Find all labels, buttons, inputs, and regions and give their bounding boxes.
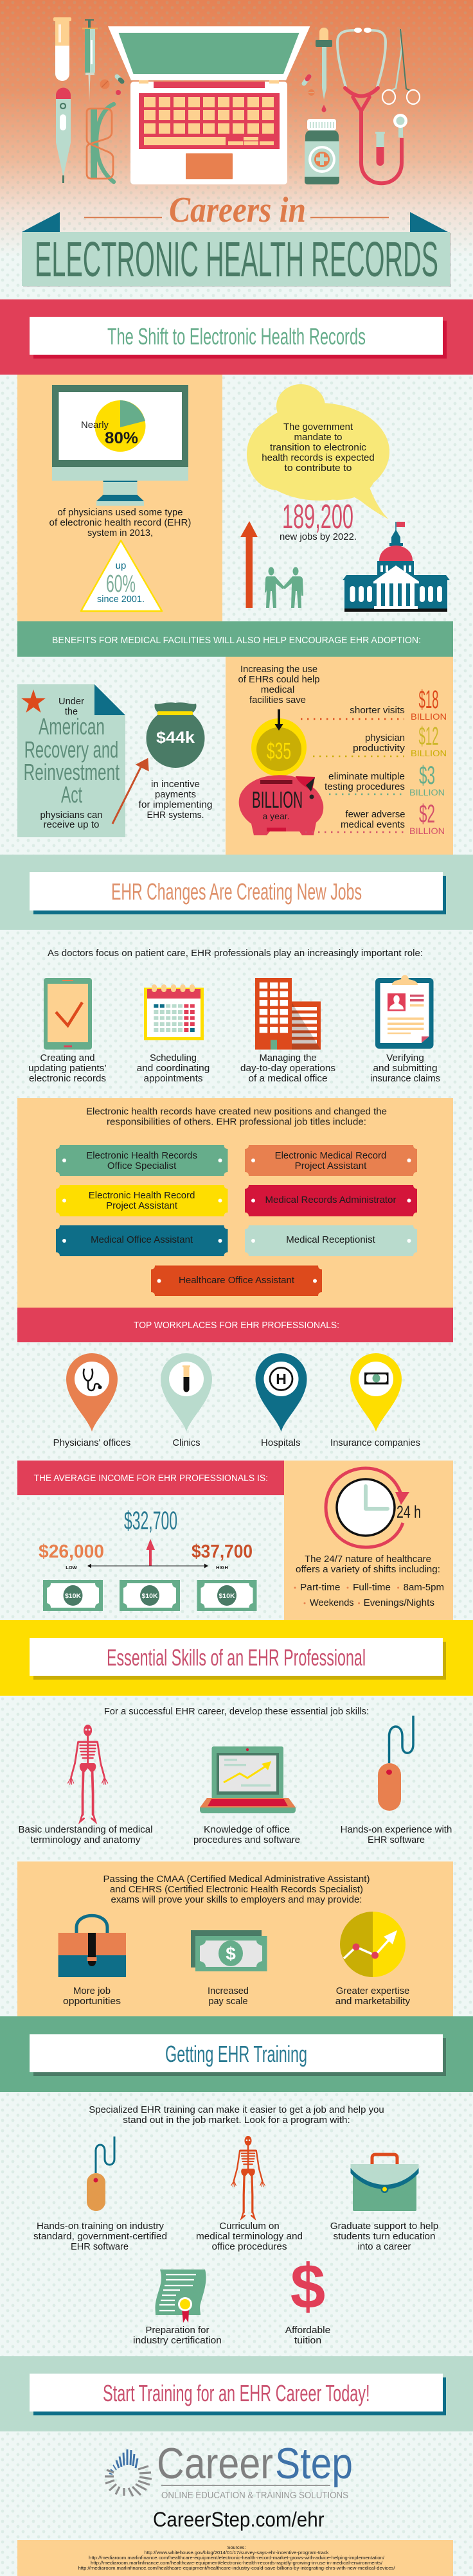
stat: fewer adverse medical events: fewer adverse: [346, 810, 405, 820]
program: curriculum: Curriculum on: [219, 2221, 280, 2232]
workplace: hospitals pin: H: [276, 1371, 287, 1387]
text: physicians statistic: of electronic health record (EHR): [49, 518, 192, 528]
banner: top workplaces: TOP WORKPLACES FOR EHR PROFESSIONALS:: [134, 1320, 339, 1331]
title: Careers in: Careers in: [169, 190, 306, 230]
benefit: greater expertise: Greater expertise: [336, 1986, 409, 1996]
icon: bill high: [197, 1580, 257, 1611]
callout: government mandate speech bubble: health records is expected: [262, 453, 375, 463]
panel: sources: http://mediaroom.marlinfinance.com/healthcare-equipment/healthcare-industry-could-save-billions-by-integrating-ehrs-with-new-medical-devices/: [78, 2566, 395, 2571]
icon: glasses: [87, 104, 114, 182]
plaque: Electronic Health Records Office Specialist: Electronic Health Records: [86, 1151, 197, 1161]
workplace: hospitals pin: [256, 1353, 307, 1448]
panel: EHR job titles: [17, 1098, 453, 1308]
callout: up 60 percent: 60%: [106, 571, 136, 598]
callout: government mandate speech bubble: The government: [283, 422, 353, 432]
icon: clipboard: [375, 975, 433, 1049]
section banner: Getting EHR Training: Getting EHR Training: [165, 2041, 307, 2067]
item: creating records: Creating and: [40, 1053, 95, 1063]
benefit: more job opportunities: [58, 1915, 126, 2007]
chart: income range: $32,700: [124, 1507, 177, 1535]
panel: sources: http://www.whitehouse.gov/blog/2014/01/17/survey-says-ehr-incentive-program-track: [144, 2551, 329, 2555]
section banner: The Shift to Electronic Health Records: [0, 299, 473, 375]
panel: American Recovery and Reinvestment Act document: physicians can: [40, 810, 103, 821]
skill: EHR software: EHR software: [368, 1835, 425, 1845]
text: 24/7 nature of healthcare: [296, 1554, 440, 1575]
program: graduate support: Graduate support to help: [330, 2221, 438, 2232]
icon: monitor with pie chart: [52, 385, 188, 506]
skill: office procedures: procedures and software: [193, 1835, 300, 1845]
section banner: Getting EHR Training: [0, 2016, 473, 2092]
icon: forceps: [382, 29, 420, 104]
plaque: Electronic Medical Record Project Assistant: Project Assistant: [295, 1161, 366, 1171]
program: affordable tuition: Affordable: [285, 2325, 330, 2336]
plaque: Medical Office Assistant: Medical Office Assistant: [91, 1235, 193, 1245]
icon: people shaking hands: [265, 567, 303, 608]
list: shift types: Full-time: [353, 1583, 391, 1593]
icon: pills right: [304, 76, 315, 96]
text: training intro: [89, 2105, 384, 2126]
program: hands-on training: [33, 2136, 167, 2252]
stat: fewer adverse medical events: BILLION: [409, 826, 445, 836]
item: creating records: electronic records: [29, 1074, 106, 1084]
text: certification intro: and CEHRS (Certified Electronic Health Records Specialist): [110, 1885, 363, 1895]
program: affordable tuition: tuition: [294, 2336, 321, 2346]
stat: shorter visits: $18: [419, 686, 438, 714]
panel: sources: http://mediaroom.marlinfinance.com/healthcare-equipment/electronic-health-records-rapidly-growing-in-use-in-medical-environments/: [91, 2561, 382, 2566]
text: certification intro: Passing the CMAA (Certified Medical Administrative Assistant): [103, 1874, 370, 1885]
text: increasing the use: medical: [261, 685, 294, 695]
panel: American Recovery and Reinvestment Act document: receive up to: [44, 820, 99, 830]
icon: dollar sign: $: [290, 2251, 325, 2322]
icon: money bag $44k: $44k: [156, 729, 195, 747]
text: certification intro: [103, 1874, 370, 1905]
icon: stethoscope: [337, 28, 407, 183]
panel: 24/7 shifts: [284, 1461, 453, 1620]
icon: test tube: [53, 17, 71, 81]
text: skills intro: For a successful EHR career, develop these essential job skills:: [104, 1707, 369, 1717]
plaque: Medical Records Administrator: Medical Records Administrator: [265, 1195, 397, 1205]
benefit: more job opportunities: opportunities: [63, 1996, 121, 2007]
plaque: Electronic Health Record Project Assistant: Electronic Health Record: [89, 1191, 195, 1201]
panel: certification benefits: [17, 1861, 453, 2016]
icon: monitor with pie chart: Nearly: [81, 420, 109, 431]
logo: CareerStep: Career: [157, 2439, 273, 2488]
text: physicians statistic: of physicians used some type: [58, 508, 183, 518]
item: verifying claims: Verifying: [386, 1053, 424, 1063]
icon: dropper: [316, 28, 332, 112]
program: hands-on training: Hands-on training on industry: [37, 2221, 165, 2232]
benefit: increased pay scale: Increased: [208, 1986, 249, 1996]
panel: savings from EHR use: [226, 657, 453, 855]
stat: 189,200 new jobs: new jobs by 2022.: [280, 531, 357, 542]
stat: 189,200 new jobs: 189,200: [282, 498, 353, 536]
list: shift types: [294, 1583, 444, 1608]
panel: American Recovery and Reinvestment Act document: American: [39, 713, 105, 740]
icon: clock with 24h arrow: 24 h: [397, 1502, 421, 1522]
icon: money bag $44k: [147, 702, 204, 768]
program: hands-on training: standard, government-certified: [33, 2232, 167, 2242]
icon: monitor with pie chart: 80%: [105, 429, 138, 447]
icon: mouse orange: [378, 1716, 413, 1811]
callout: up 60 percent: since 2001.: [97, 594, 145, 605]
program: curriculum: [196, 2136, 303, 2252]
text: incentive payments: in incentive: [151, 779, 200, 790]
stat: eliminate multiple testing procedures: [325, 761, 445, 797]
arrow: job growth: [240, 521, 258, 608]
text: job titles intro: responsibilities of others. EHR professional job titles include:: [107, 1117, 366, 1127]
list: shift types: Weekends: [310, 1598, 354, 1608]
text: 24/7 nature of healthcare: The 24/7 nature of healthcare: [305, 1554, 431, 1565]
program: certification preparation: [133, 2270, 222, 2346]
callout: up 60 percent: up: [116, 560, 126, 571]
stat: physician productivity: physician: [365, 733, 405, 743]
benefit: greater expertise: and marketability: [335, 1996, 411, 2007]
panel: American Recovery and Reinvestment Act document: Reinvestment: [24, 759, 120, 785]
item: verifying claims: insurance claims: [370, 1074, 440, 1084]
panel: sources: [17, 2540, 453, 2576]
icon: medicine bottle: [305, 119, 339, 184]
icon: skeleton red: [68, 1725, 108, 1822]
callout: up 60 percent: [81, 540, 162, 611]
plaque: Medical Receptionist: [245, 1225, 417, 1256]
plaque: Electronic Health Records Office Specialist: [56, 1145, 228, 1176]
workplace: physicians' offices pin: Physicians' offices: [53, 1438, 130, 1448]
callout: government mandate speech bubble: mandate to: [294, 432, 342, 443]
panel: American Recovery and Reinvestment Act document: Act: [61, 781, 82, 808]
icon: bill mid: [120, 1580, 180, 1611]
logo: CareerStep: [105, 2439, 353, 2501]
workplace: insurance companies pin: [330, 1353, 420, 1448]
skill: office procedures: [193, 1746, 300, 1845]
skill: medical terminology: [18, 1725, 152, 1845]
program: graduate support: [330, 2154, 438, 2252]
item: managing operations: of a medical office: [248, 1074, 328, 1084]
program: affordable tuition: [285, 2251, 330, 2346]
item: scheduling: Scheduling: [150, 1053, 197, 1063]
text: intro to new jobs: As doctors focus on patient care, EHR professionals play an increasingly important role:: [48, 948, 423, 959]
plaque: Electronic Medical Record Project Assistant: [245, 1145, 417, 1176]
program: graduate support: into a career: [357, 2242, 411, 2252]
icon: bill low: [43, 1580, 103, 1611]
icon: pills left: [100, 76, 122, 95]
panel: American Recovery and Reinvestment Act document: Recovery and: [24, 736, 118, 763]
icon: capitol building: [343, 522, 450, 612]
text: job titles intro: [86, 1106, 387, 1127]
item: scheduling: [137, 984, 210, 1084]
plaque: Healthcare Office Assistant: [151, 1266, 322, 1296]
benefit: increased pay scale: [191, 1930, 267, 2007]
banner: average income: [17, 1461, 284, 1495]
icon: logo swirl: [105, 2449, 152, 2496]
panel: sources: Sources:: [228, 2546, 246, 2550]
icon: clock with 24h arrow: [326, 1468, 421, 1547]
stat: shorter visits: shorter visits: [350, 706, 405, 716]
banner: average income: THE AVERAGE INCOME FOR EHR PROFESSIONALS IS:: [33, 1473, 268, 1484]
section banner: Start Training for an EHR Career Today: [0, 2356, 473, 2431]
logo: CareerStep: ONLINE EDUCATION & TRAINING SOLUTIONS: [161, 2490, 348, 2501]
stat: shorter visits: [301, 686, 447, 722]
program: curriculum: medical terminology and: [196, 2232, 303, 2242]
icon: bill high: $10K: [219, 1592, 235, 1600]
stat: shorter visits: BILLION: [411, 711, 447, 722]
item: scheduling: and coordinating: [137, 1063, 210, 1074]
chart: income range: LOW: [66, 1565, 78, 1570]
icon: piggy bank: a year.: [262, 811, 289, 821]
stat: eliminate multiple testing procedures: $3: [419, 761, 435, 790]
icon: skeleton orange: [231, 2136, 265, 2218]
banner: benefits for medical facilities: BENEFITS FOR MEDICAL FACILITIES WILL ALSO HELP ENCOURAGE EHR ADOPTION:: [52, 635, 421, 646]
list: shift types: 8am-5pm: [404, 1583, 444, 1593]
text: incentive payments: payments: [155, 790, 196, 800]
stat: fewer adverse medical events: [305, 800, 445, 836]
text: increasing the use: facilities save: [249, 695, 306, 706]
icon: briefcase: [351, 2154, 419, 2211]
icon: small blood tube: [375, 132, 385, 166]
stat: eliminate multiple testing procedures: testing procedures: [325, 782, 405, 792]
workplace: clinics pin: Clinics: [172, 1438, 201, 1448]
item: managing operations: [240, 978, 335, 1084]
panel: American Recovery and Reinvestment Act document: Under: [58, 697, 84, 707]
item: managing operations: Managing the: [260, 1053, 316, 1063]
program: certification preparation: industry certification: [133, 2336, 222, 2346]
callout: government mandate speech bubble: transition to electronic: [270, 443, 366, 453]
program: hands-on training: EHR software: [71, 2242, 129, 2252]
skill: office procedures: Knowledge of office: [204, 1825, 290, 1835]
workplace: insurance companies pin: Insurance companies: [330, 1438, 420, 1448]
plaque: Medical Records Administrator: [245, 1185, 417, 1216]
callout: government mandate speech bubble: to contribute to: [284, 463, 352, 474]
skill: medical terminology: Basic understanding of medical: [18, 1825, 152, 1835]
icon: syringe: [82, 19, 98, 101]
icon: bill mid: $10K: [141, 1592, 158, 1600]
text: physicians statistic: system in 2013,: [87, 528, 153, 538]
text: training intro: Specialized EHR training can make it easier to get a job and help you: [89, 2105, 384, 2115]
logo: CareerStep: Step: [275, 2439, 353, 2488]
workplace: hospitals pin: Hospitals: [261, 1438, 301, 1448]
text: increasing the use: [238, 664, 320, 706]
arrow: into coin: [275, 709, 283, 731]
stat: physician productivity: $12: [419, 722, 438, 751]
skill: medical terminology: terminology and anatomy: [31, 1835, 141, 1845]
benefit: greater expertise: [335, 1912, 411, 2007]
skill: EHR software: [341, 1716, 452, 1845]
stat: fewer adverse medical events: medical events: [341, 820, 405, 830]
panel: American Recovery and Reinvestment Act document: the: [65, 707, 78, 717]
item: managing operations: day-to-day operations: [240, 1063, 335, 1074]
plaque: Healthcare Office Assistant: Healthcare Office Assistant: [179, 1275, 294, 1286]
item: scheduling: appointments: [144, 1074, 203, 1084]
text: job titles intro: Electronic health records have created new positions and changed the: [86, 1106, 387, 1117]
section banner: Essential Skills of an EHR Professional: [0, 1620, 473, 1696]
plaque: Medical Receptionist: Medical Receptionist: [286, 1235, 375, 1245]
icon: laptop with chart: [200, 1746, 296, 1813]
banner: top workplaces: [17, 1308, 453, 1342]
chart: income range: [39, 1507, 257, 1611]
chart: income range: $37,700: [192, 1541, 253, 1562]
list: shift types: Part-time: [300, 1583, 341, 1593]
stat: fewer adverse medical events: $2: [419, 800, 435, 828]
item: verifying claims: and submitting: [373, 1063, 437, 1074]
text: increasing the use: Increasing the use: [240, 664, 317, 675]
panel: sources: http://mediaroom.marlinfinance.com/healthcare-equipment/electronic-health-record-market-grows-with-advice-helping-implementation/: [89, 2556, 384, 2561]
panel: physicians using EHR: [17, 375, 222, 621]
stat: 189,200 new jobs: [280, 498, 357, 542]
text: incentive payments: EHR systems.: [147, 810, 204, 821]
program: curriculum: office procedures: [212, 2242, 287, 2252]
icon: star: [21, 689, 46, 713]
icon: coin $35: $35: [267, 738, 291, 764]
icon: piggy bank: BILLION: [252, 786, 303, 813]
text: training intro: stand out in the job market. Look for a program with:: [123, 2115, 350, 2126]
stat: eliminate multiple testing procedures: BILLION: [409, 787, 445, 797]
list: shift types: Evenings/Nights: [364, 1598, 434, 1608]
item: creating records: updating patients’: [28, 1063, 107, 1074]
item: verifying claims: [370, 975, 440, 1084]
text: incentive payments: [139, 779, 212, 821]
plaque: Electronic Medical Record Project Assistant: Electronic Medical Record: [275, 1151, 386, 1161]
panel: American Recovery and Reinvestment Act document: [17, 684, 125, 837]
icon: piggy bank: [239, 775, 323, 835]
stat: eliminate multiple testing procedures: eliminate multiple: [328, 772, 405, 782]
stat: physician productivity: BILLION: [411, 748, 447, 758]
skill: EHR software: Hands-on experience with: [341, 1825, 452, 1835]
item: creating records: [28, 978, 107, 1084]
plaque: Electronic Health Records Office Specialist: Office Specialist: [107, 1161, 176, 1171]
program: certification preparation: Preparation for: [145, 2325, 210, 2336]
text: 24/7 nature of healthcare: offers a variety of shifts including:: [296, 1565, 440, 1575]
section banner: EHR Changes Are Creating New Jobs: [0, 855, 473, 930]
program: graduate support: students turn education: [333, 2232, 436, 2242]
stat: physician productivity: [313, 722, 447, 758]
workplace: clinics pin: [161, 1353, 212, 1448]
icon: mouse: [87, 2136, 114, 2211]
plaque: Electronic Health Record Project Assistant: Project Assistant: [106, 1201, 177, 1211]
banner: benefits for medical facilities: [17, 621, 453, 657]
plaque: Medical Office Assistant: [56, 1225, 228, 1256]
icon: bill low: $10K: [65, 1592, 81, 1600]
text: increasing the use: of EHRs could help: [238, 675, 320, 685]
text: website url: CareerStep.com/ehr: [153, 2508, 325, 2531]
workplace: physicians' offices pin: [53, 1353, 130, 1448]
icon: certificate: [156, 2270, 206, 2323]
callout: government mandate speech bubble: [247, 384, 389, 519]
text: physicians statistic: [49, 508, 192, 538]
benefit: increased pay scale: $: [226, 1944, 236, 1964]
chart: income range: HIGH: [216, 1565, 228, 1570]
icon: coin $35: [251, 718, 307, 776]
icon: thermometer: [56, 87, 71, 183]
text: incentive payments: for implementing: [139, 800, 212, 810]
icon: phone with check: [44, 978, 92, 1050]
stat: physician productivity: productivity: [353, 743, 406, 754]
icon: calendar: [144, 984, 204, 1040]
benefit: more job opportunities: More job: [73, 1986, 111, 1996]
plaque: Electronic Health Record Project Assistant: [56, 1185, 228, 1216]
benefit: increased pay scale: pay scale: [208, 1996, 248, 2007]
icon: office building: [255, 978, 321, 1050]
text: certification intro: exams will prove your skills to employers and may provide:: [111, 1895, 362, 1905]
title ribbon: Electronic Health Records: [22, 212, 451, 287]
chart: income range: $26,000: [39, 1541, 104, 1562]
icon: laptop: [108, 26, 310, 184]
arrow: to incentive: [112, 759, 148, 824]
